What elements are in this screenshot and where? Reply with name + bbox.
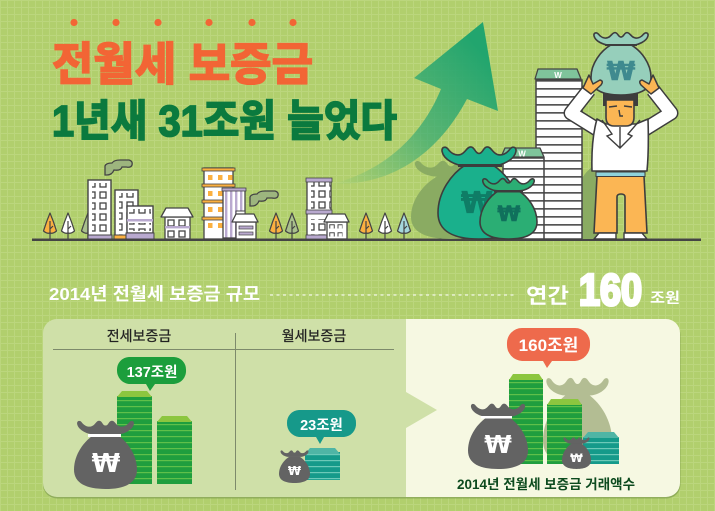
section heading: 2014년 전월세 보증금 규모 [49, 284, 260, 304]
large teal money bag [438, 147, 520, 239]
title: 전월세 보증금 [52, 40, 313, 90]
money bag: monthly: ₩ [288, 464, 302, 478]
money bag: total small: ₩ [570, 451, 583, 465]
short money tower [501, 148, 544, 239]
decorative title dots [70, 19, 297, 26]
caption: 2014년 전월세 보증금 거래액수 [457, 476, 635, 492]
bubble: 23 [287, 410, 356, 444]
short money tower: W [518, 150, 526, 158]
heading: monthly rent: 월세보증금 [282, 328, 346, 344]
man: collar [602, 120, 640, 148]
bubble: 23: 23조원 [300, 417, 343, 434]
annual total [526, 265, 680, 315]
annual total: 연간 [526, 285, 569, 308]
city: left trees [44, 213, 94, 239]
money bag: total large: ₩ [484, 430, 512, 459]
tall orange building [202, 168, 235, 239]
smoke cloud 2 [250, 191, 278, 206]
ghost bags [411, 161, 600, 239]
man: carried bag [591, 33, 651, 95]
pointer triangle [406, 392, 437, 428]
stack: jeonse short [157, 416, 192, 484]
title: 1년새 31조원 늘었다 [52, 97, 397, 145]
stack: total short [547, 399, 582, 464]
arrow: rising trend [332, 22, 498, 184]
money bag: jeonse: ₩ [92, 449, 121, 479]
striped building and shop [222, 188, 258, 239]
man: belt [596, 172, 645, 176]
panel: breakdown [43, 319, 406, 497]
ghost bag [543, 378, 612, 465]
money bag: monthly [279, 450, 310, 483]
buildings group 1 [88, 180, 154, 239]
man: face [609, 106, 632, 116]
heading: jeonse: 전세보증금 [107, 328, 171, 344]
money bag: jeonse [74, 421, 137, 489]
man: hands [583, 75, 659, 94]
purple building and shop [306, 178, 349, 239]
bubble: 137: 137조원 [127, 364, 177, 381]
stack: monthly [305, 448, 340, 480]
bubble: 160: 160조원 [519, 336, 578, 355]
ground line [32, 238, 701, 241]
tall money tower: W [554, 71, 562, 80]
man: trousers [594, 176, 647, 233]
stack: jeonse tall [117, 391, 152, 484]
title [52, 40, 397, 145]
bubble: 137 [117, 357, 186, 391]
panel shadow [43, 321, 680, 498]
stack: total tall [509, 374, 543, 464]
man holding money bag [571, 33, 671, 239]
city: right trees [360, 213, 410, 239]
tall money tower [535, 69, 582, 239]
man: head [606, 100, 634, 126]
money bag: total small [562, 437, 591, 469]
man: shoes [594, 233, 647, 239]
annual total: 조원 [650, 290, 680, 307]
small green money bag [480, 179, 537, 239]
dashed leader line [270, 294, 515, 296]
man: carried bag: ₩ [607, 57, 636, 87]
man: arms [571, 90, 671, 131]
house [161, 208, 193, 239]
man: shirt [592, 119, 648, 171]
panel: total [406, 319, 680, 497]
small green money bag: ₩ [497, 202, 521, 226]
annual total: 160 [579, 265, 642, 315]
man: hair [603, 92, 638, 106]
large teal money bag: ₩ [461, 186, 493, 220]
smoke cloud 1 [105, 160, 132, 175]
city: middle trees [270, 213, 298, 239]
stack: total teal [583, 432, 619, 464]
money bag: total large [468, 404, 528, 469]
bubble: 160 [507, 328, 590, 368]
